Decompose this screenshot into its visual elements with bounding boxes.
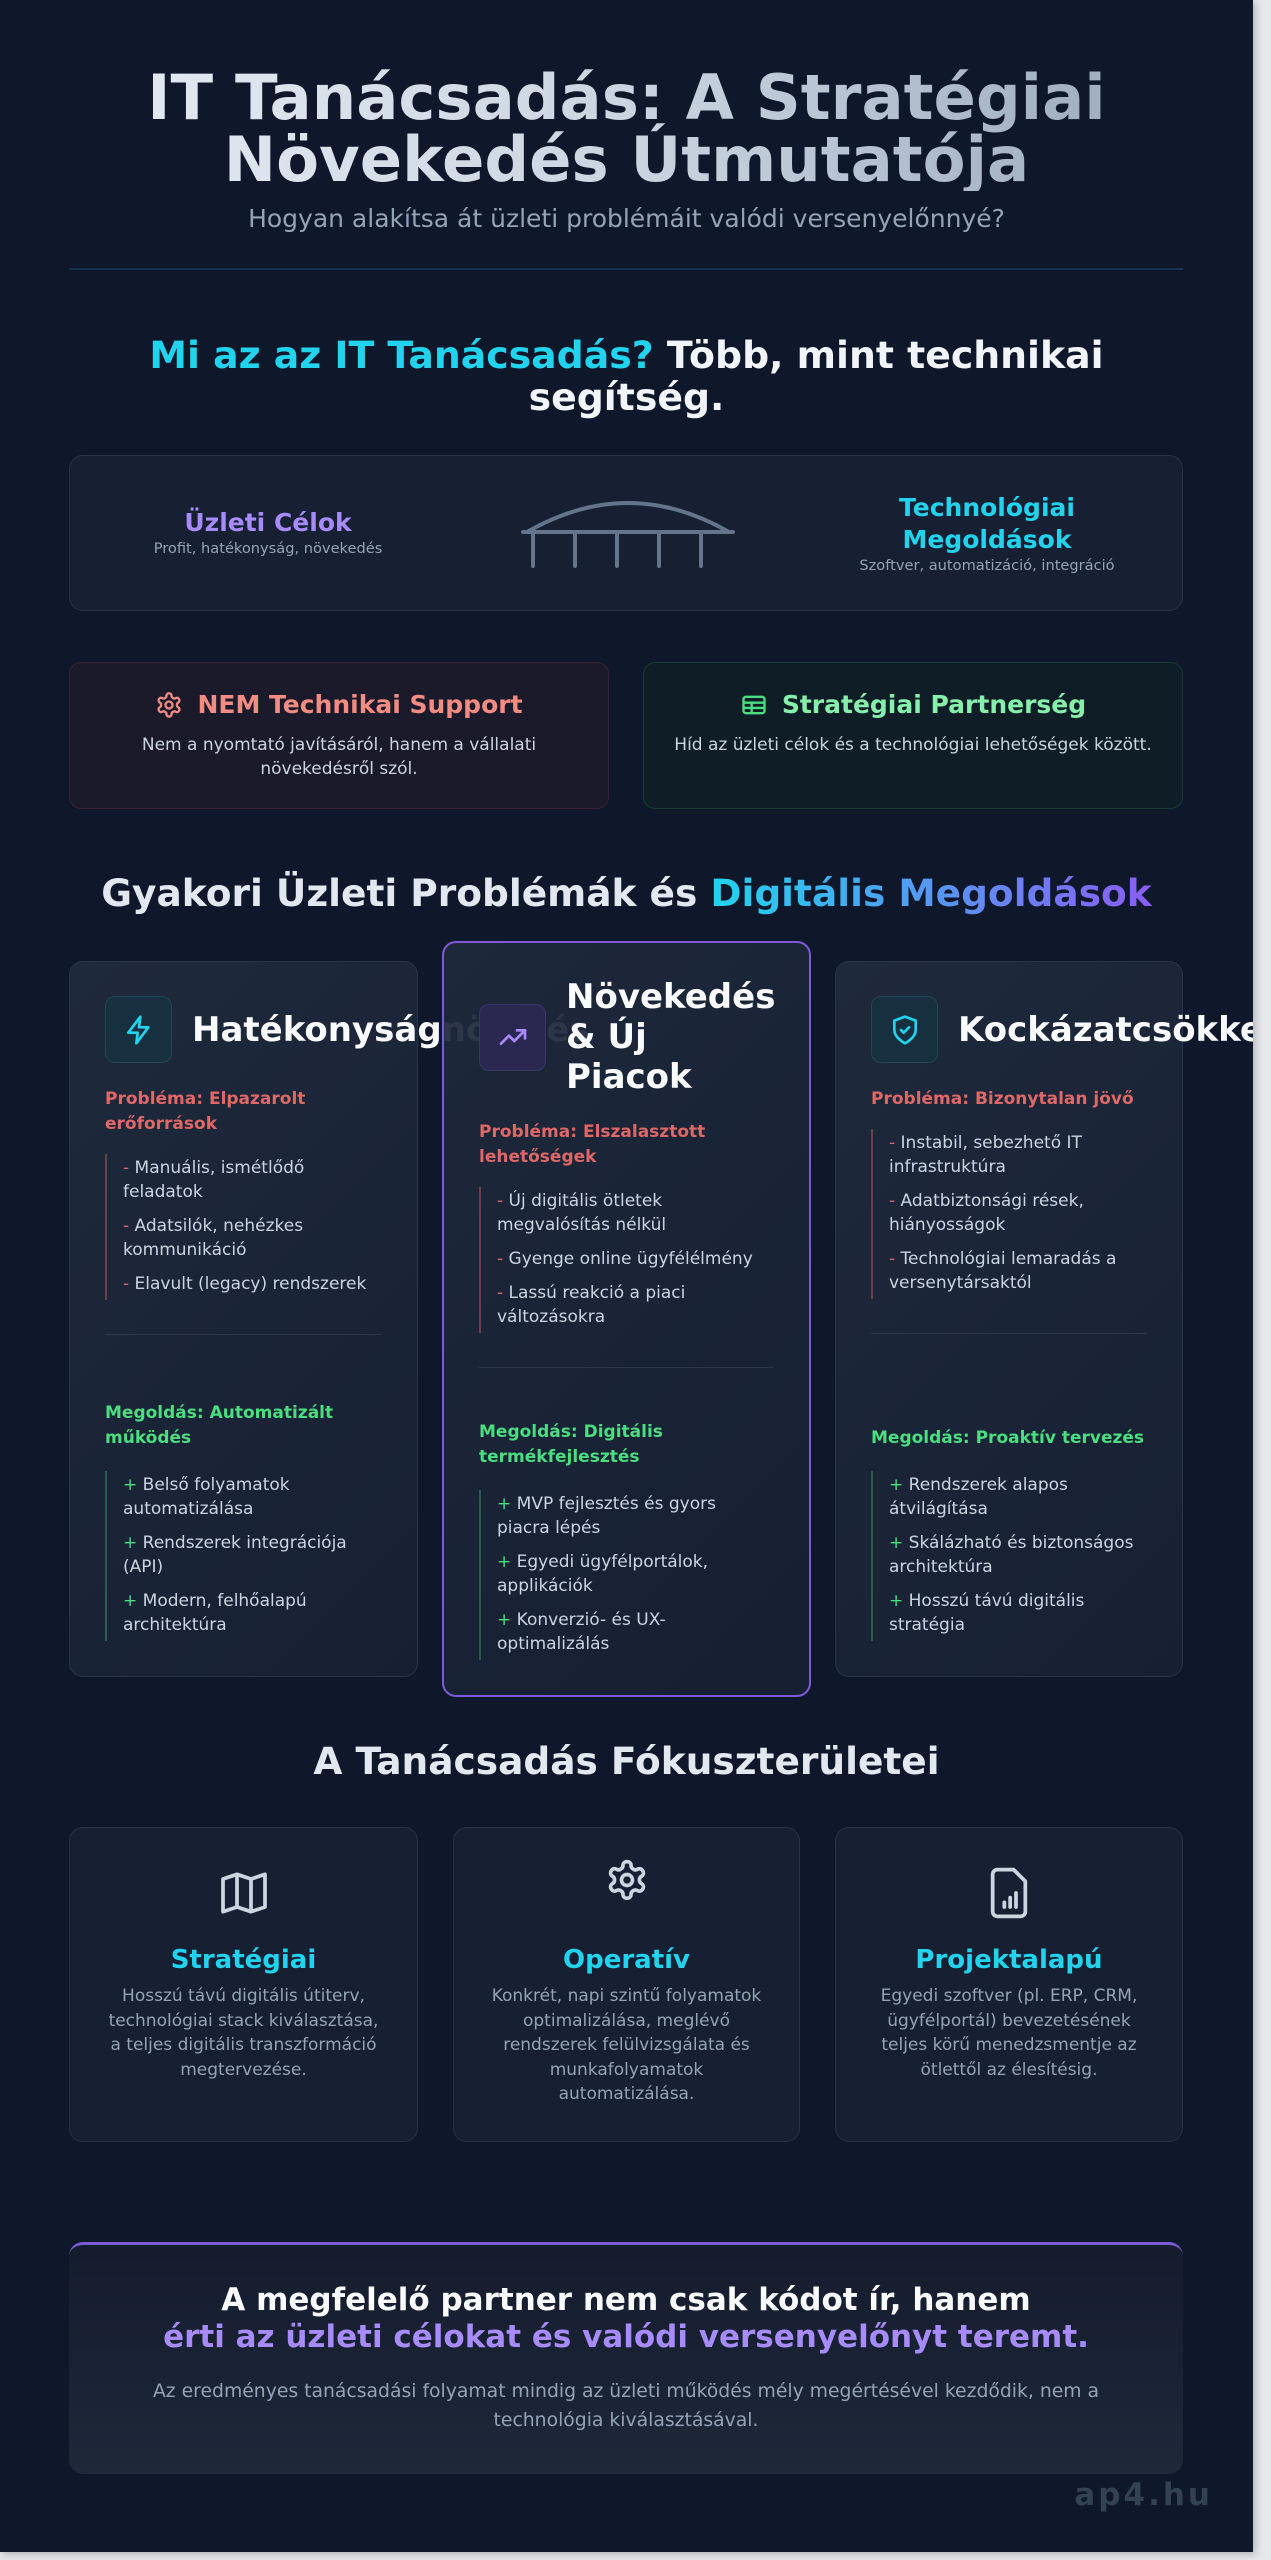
card: risk reduction: + Rendszerek alapos átvilágítása (889, 1475, 1068, 1519)
card: risk reduction (835, 961, 1183, 1677)
card: risk reduction: + Skálázható és biztonságos architektúra (889, 1533, 1133, 1577)
callout text: Az eredményes tanácsadási folyamat mindig az üzleti működés mély megértésével kezdődik, nem a technológia kiválasztásával. (153, 2381, 1099, 2431)
card: growth (highlighted): + Konverzió- és UX-optimalizálás (497, 1610, 666, 1654)
panel: strategic partnership (643, 662, 1183, 809)
focus card: project based: Egyedi szoftver (pl. ERP, CRM, ügyfélportál) bevezetésének teljes körű menedzsmentje az ötlettől az élesítésig. (881, 1986, 1137, 2080)
panel: not tech support (69, 662, 609, 809)
heading: what is IT consulting: Mi az az IT Tanácsadás? Több, mint technikai (149, 333, 1104, 377)
card: efficiency: - Elavult (legacy) rendszerek (123, 1274, 366, 1294)
text: Híd az üzleti célok és a technológiai lehetőségek között. (674, 735, 1152, 755)
title (0, 67, 1253, 191)
focus card: strategic: Stratégiai (171, 1945, 316, 1975)
icon: map (221, 1872, 267, 1914)
heading: problems & solutions: Gyakori Üzleti Problémák és Digitális Megoldások (101, 871, 1152, 915)
callout headline (163, 2282, 1089, 2355)
problem: Probléma: Elszalasztott lehetőségek (479, 1122, 705, 1167)
heading: what is IT consulting: segítség. (529, 375, 724, 419)
card: efficiency: + Modern, felhőalapú architektúra (123, 1591, 307, 1635)
card header (871, 996, 1253, 1063)
callout headline: érti az üzleti célokat és valódi versenyelőnyt teremt. (163, 2319, 1089, 2355)
text: technology solutions: Megoldások (903, 525, 1071, 554)
card: risk reduction: - Technológiai lemaradás a versenytársaktól (889, 1249, 1116, 1293)
text (142, 735, 536, 779)
icon: cog (608, 1860, 646, 1900)
title: IT Tanácsadás: A Stratégiai (147, 61, 1106, 134)
focus card: strategic: Hosszú távú digitális útiterv, technológiai stack kiválasztása, a teljes digitális transzformáció megtervezése. (109, 1986, 378, 2080)
watermark: ap4.hu (1074, 2477, 1213, 2513)
card: growth (highlighted): - Lassú reakció a piaci változásokra (497, 1283, 685, 1327)
icon: file chart (990, 1868, 1028, 1918)
card header: Növekedés & Új Piacok (566, 977, 775, 1097)
subtitle: Hogyan alakítsa át üzleti problémáit valódi versenyelőnnyé? (248, 204, 1005, 233)
panel: bridge (69, 455, 1183, 611)
text: business goals: Üzleti Célok (184, 508, 352, 537)
card: efficiency: - Manuális, ismétlődő feladatok (123, 1158, 304, 1202)
card: growth (highlighted): + MVP fejlesztés és gyors piacra lépés (497, 1494, 716, 1538)
text: technology solutions: Technológiai (899, 493, 1075, 522)
heading: focus areas: A Tanácsadás Fókuszterületei (313, 1739, 940, 1783)
solution: Megoldás: Proaktív tervezés (871, 1428, 1144, 1448)
text: növekedésről szól. (260, 759, 418, 779)
callout headline: A megfelelő partner nem csak kódot ír, hanem (221, 2282, 1031, 2318)
closing callout (69, 2242, 1183, 2474)
card: risk reduction: - Instabil, sebezhető IT infrastruktúra (889, 1133, 1082, 1177)
card: efficiency: - Adatsilók, nehézkes kommunikáció (123, 1216, 303, 1260)
card header (105, 996, 589, 1063)
card: efficiency: + Belső folyamatok automatizálása (123, 1475, 290, 1519)
card: growth (highlighted) (442, 941, 811, 1697)
text: technology solutions (859, 493, 1115, 574)
focus card: strategic (69, 1827, 418, 2142)
text: Nem a nyomtató javításáról, hanem a vállalati (142, 735, 536, 755)
focus card: project based: Projektalapú (915, 1945, 1103, 1975)
text: business goals: Profit, hatékonyság, növekedés (154, 540, 382, 557)
title: Növekedés Útmutatója (224, 123, 1029, 196)
problem: Probléma: Elpazarolt erőforrások (105, 1089, 305, 1134)
heading with gear icon: NEM Technikai Support (197, 690, 523, 719)
card: growth (highlighted): - Új digitális ötletek megvalósítás nélkül (497, 1191, 666, 1235)
focus card: operative (453, 1827, 800, 2142)
card: growth (highlighted): - Gyenge online ügyfélélmény (497, 1249, 753, 1269)
problem: Probléma: Bizonytalan jövő (871, 1089, 1134, 1109)
text: business goals (154, 508, 382, 557)
card: efficiency: + Rendszerek integrációja (API) (123, 1533, 347, 1577)
icon: bridge (521, 501, 735, 568)
card: risk reduction: - Adatbiztonsági rések, hiányosságok (889, 1191, 1084, 1235)
focus card: project based (835, 1827, 1183, 2142)
solution: Megoldás: Automatizált működés (105, 1403, 333, 1448)
card: risk reduction: + Hosszú távú digitális stratégia (889, 1591, 1084, 1635)
heading with table icon: Stratégiai Partnerség (782, 690, 1086, 719)
card: efficiency: Hatékonyságnövelés (192, 1010, 589, 1050)
heading: what is IT consulting (149, 333, 1104, 419)
card: growth (highlighted): + Egyedi ügyfélportálok, applikációk (497, 1552, 708, 1596)
solution: Megoldás: Digitális termékfejlesztés (479, 1422, 663, 1467)
card: efficiency (69, 961, 418, 1677)
text: technology solutions: Szoftver, automatizáció, integráció (859, 557, 1115, 574)
focus card: operative: Operatív (563, 1945, 690, 1975)
focus card: operative: Konkrét, napi szintű folyamatok optimalizálása, meglévő rendszerek felülvizsgálata és munkafolyamatok automatizálása. (492, 1986, 761, 2104)
